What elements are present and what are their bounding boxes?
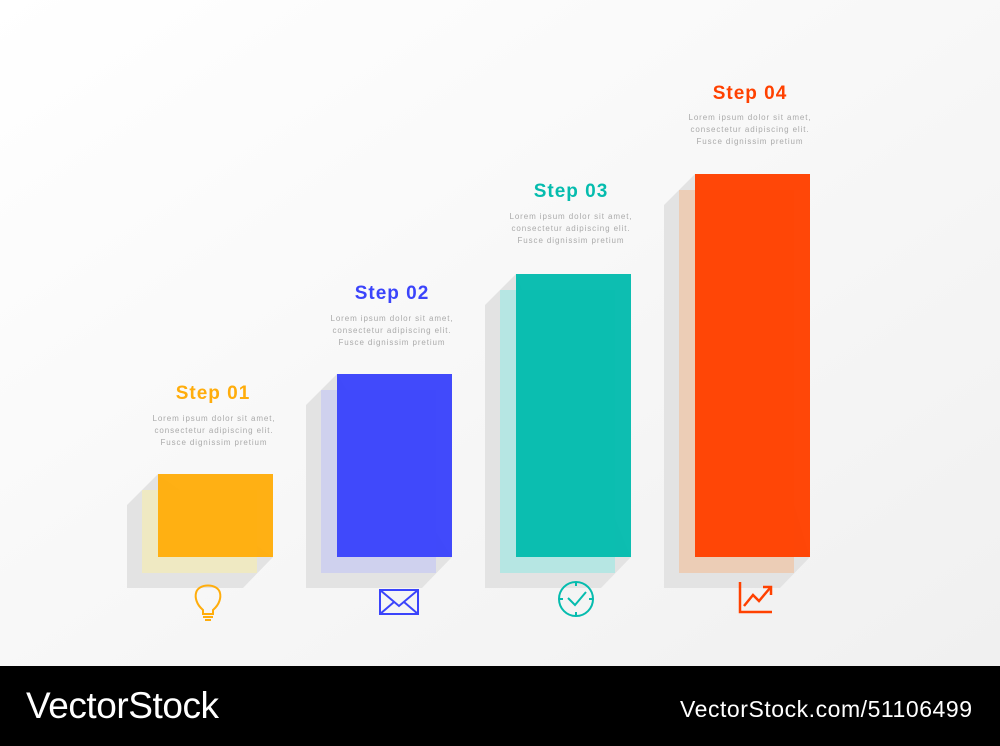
text: step 02: Fusce dignissim pretium [339,338,445,347]
icon: light bulb [196,586,220,620]
bar: step 03 [485,274,631,588]
bar: step 01 [127,474,273,588]
icon: growth chart [740,582,772,612]
text: step 03: Lorem ipsum dolor sit amet, [509,212,633,221]
text: step 04 [688,83,812,146]
icon: clock [559,582,593,616]
text: step 04: Step 04 [713,83,787,104]
text: step 03: consectetur adipiscing elit. [511,224,631,233]
bar: step 04 [664,174,810,588]
text: step 03 [509,181,633,245]
text: step 01 [152,383,276,447]
text: step 01: Lorem ipsum dolor sit amet, [152,414,276,423]
text: step 04: Lorem ipsum dolor sit amet, [688,113,812,122]
text: step 01: consectetur adipiscing elit. [154,426,274,435]
text: step 02: Lorem ipsum dolor sit amet, [330,314,454,323]
text: step 01: Step 01 [176,383,250,404]
bar: step 02 [306,374,452,588]
icon: envelope [380,590,418,614]
text: step 04: consectetur adipiscing elit. [690,125,810,134]
text: step 04: Fusce dignissim pretium [697,137,803,146]
text: step 03: Step 03 [534,181,608,202]
text: step 01: Fusce dignissim pretium [161,438,267,447]
text: step 02: Step 02 [355,283,429,304]
footer: VectorStock.com/51106499 [680,696,972,722]
footer: VectorStock [26,685,220,726]
footer [0,666,1000,746]
text: step 03: Fusce dignissim pretium [518,236,624,245]
text: step 02 [330,283,454,347]
text: step 02: consectetur adipiscing elit. [332,326,452,335]
